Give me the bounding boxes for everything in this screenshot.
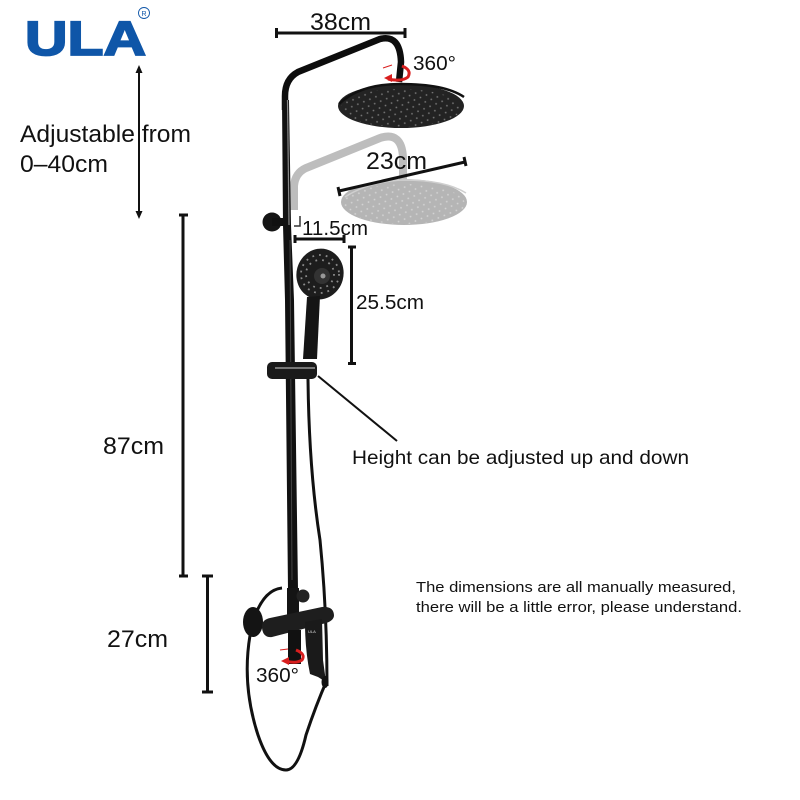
dimension: 38cm: 38cm — [310, 9, 371, 36]
callout text: height adjust: Height can be adjusted up and down — [352, 447, 689, 469]
dimension: 25.5cm — [348, 247, 424, 364]
note: measurement disclaimer: there will be a little error, please understand. — [416, 599, 742, 616]
note: measurement disclaimer — [416, 579, 742, 616]
note: measurement disclaimer: The dimensions are all manually measured, — [416, 579, 736, 596]
dimension: 87cm: 87cm — [103, 433, 164, 460]
text: adjustable from: Adjustable from — [20, 121, 191, 148]
top shower head — [338, 84, 464, 128]
dimension: 23cm: 23cm — [366, 148, 427, 175]
rotation arrow: top — [383, 65, 409, 82]
callout line: height adjust — [318, 376, 397, 441]
dimension: 27cm — [107, 576, 213, 692]
hose — [247, 379, 327, 770]
logo: ULA: R — [142, 11, 147, 18]
label: 360 degrees top: 360° — [413, 52, 456, 75]
mixer valve and spout — [243, 588, 334, 688]
hand shower — [291, 243, 349, 359]
rotation arrow: bottom — [280, 649, 303, 665]
mixer valve and spout: ULA — [308, 629, 316, 634]
arrow: adjustable height — [136, 65, 142, 219]
label: 360 degrees bottom: 360° — [256, 664, 299, 687]
text: 0-40cm: 0–40cm — [20, 151, 108, 178]
dimension: 87cm — [103, 215, 188, 576]
dimension: 27cm: 27cm — [107, 626, 168, 653]
ghost shower arm and head (lowered position) — [294, 137, 467, 225]
dimension: 23cm — [338, 148, 466, 196]
dimension: 11.5cm: 11.5cm — [302, 217, 368, 240]
shower riser pole — [282, 38, 401, 590]
dimension: 38cm — [276, 9, 405, 38]
dimension: 25.5cm: 25.5cm — [356, 291, 424, 314]
sliding bracket — [267, 362, 317, 379]
logo: ULA: ULA — [25, 13, 146, 66]
wall bracket — [262, 212, 300, 232]
